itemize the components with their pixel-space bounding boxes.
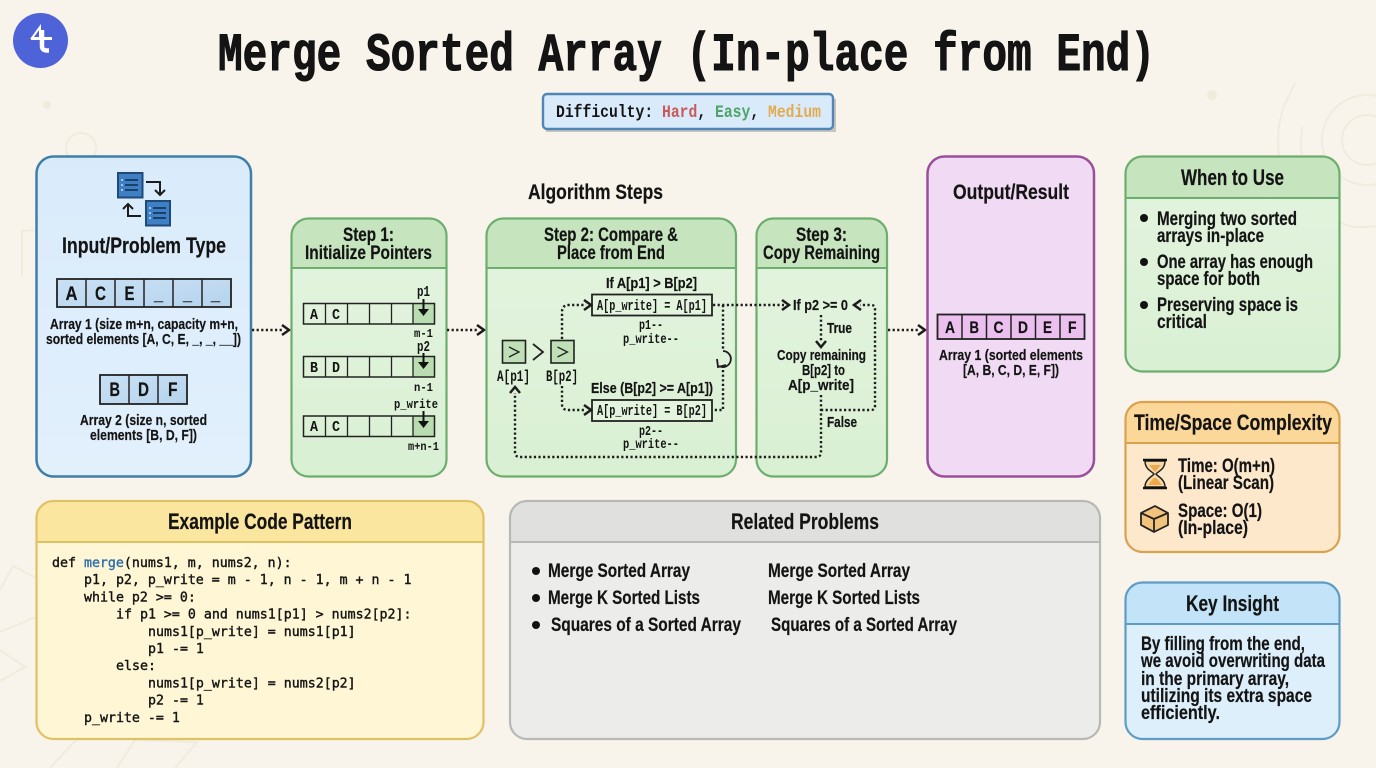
- result array: F: [1068, 318, 1076, 337]
- array row p_write: m+n-1: [408, 440, 439, 454]
- false label: False: [827, 414, 857, 431]
- code block: p1, p2, p_write = m - 1, n - 1, m + n - 1: [84, 573, 411, 588]
- comparison boxes: [497, 340, 578, 386]
- array 2 caption: [80, 412, 207, 444]
- step 3 heading: [763, 225, 880, 264]
- step 3 heading: Copy Remaining: [763, 243, 880, 264]
- else branch: [591, 380, 713, 453]
- result array: E: [1043, 318, 1052, 337]
- array row p1: p1: [417, 285, 430, 301]
- panel: output/result: [928, 156, 1094, 476]
- bullet list: Merging two sorted: [1157, 209, 1297, 230]
- step 2 heading: [544, 225, 678, 264]
- array row p2: n-1: [414, 381, 433, 395]
- array 1: [57, 279, 231, 307]
- array 1 caption: sorted elements [A, C, E, _, _, __]): [46, 331, 241, 348]
- logo: [13, 13, 68, 68]
- code block: p2 -= 1: [148, 694, 204, 709]
- array 1: C: [95, 284, 106, 305]
- difficulty badge: Difficulty: Hard, Easy, Medium: [556, 103, 821, 123]
- bullet list: One array has enough: [1157, 252, 1313, 273]
- time text: [1178, 456, 1275, 494]
- arrow: input to step 1: [252, 325, 289, 335]
- array 2: F: [168, 380, 178, 401]
- heading: Input/Problem Type: [62, 233, 226, 258]
- array 1: E: [124, 284, 134, 305]
- code block: nums1[p_write] = nums2[p2]: [148, 676, 356, 691]
- array 1: _: [210, 284, 220, 305]
- array row p1: C: [332, 308, 340, 324]
- result array: A: [945, 318, 955, 337]
- related list: Merge Sorted Array: [768, 561, 910, 582]
- code block: def merge(nums1, m, nums2, n):: [52, 556, 292, 571]
- code block: if p1 >= 0 and nums1[p1] > nums2[p2]:: [116, 608, 412, 623]
- code heading: Example Code Pattern: [168, 509, 352, 534]
- array 2 caption: elements [B, D, F]): [90, 427, 197, 444]
- condition: If p2 >= 0: [793, 297, 848, 314]
- array row p2: p2: [417, 340, 430, 356]
- key insight text: in the primary array,: [1141, 669, 1289, 690]
- else branch: Else (B[p2] >= A[p1]): [591, 380, 713, 397]
- array 1: _: [153, 284, 163, 305]
- code block: p1 -= 1: [148, 642, 204, 657]
- comparison boxes: B[p2]: [546, 368, 578, 386]
- result array: C: [994, 318, 1004, 337]
- code block: else:: [116, 659, 156, 674]
- if branch: A[p_write] = A[p1]: [597, 299, 707, 315]
- array 2 caption: Array 2 (size n, sorted: [80, 412, 207, 429]
- array 2: D: [138, 380, 149, 401]
- key insight text: efficiently.: [1141, 703, 1220, 724]
- difficulty badge: [543, 94, 836, 132]
- true label: True: [827, 320, 852, 337]
- related list: Squares of a Sorted Array: [551, 615, 741, 636]
- panel: input/problem type: [36, 156, 251, 476]
- code block: [52, 556, 412, 726]
- panel: example code pattern: [36, 501, 484, 739]
- flow arrows across steps 2 and 3: [510, 300, 875, 457]
- bullet list: arrays in-place: [1157, 226, 1264, 247]
- copy remaining text: [777, 347, 866, 394]
- related list: [532, 561, 957, 636]
- if branch: p_write--: [623, 333, 679, 348]
- array row p2: B: [310, 361, 318, 377]
- array 1 caption: [46, 316, 241, 348]
- copy remaining text: A[p_write]: [788, 377, 854, 394]
- array 2: [100, 375, 187, 404]
- arrow: step 1 to step 2: [447, 325, 484, 335]
- if branch: [592, 275, 712, 348]
- key insight text: utilizing its extra space: [1141, 686, 1312, 707]
- result caption: Array 1 (sorted elements: [939, 347, 1083, 364]
- related list: Squares of a Sorted Array: [771, 615, 957, 636]
- array row p_write: p_write: [394, 397, 438, 412]
- bullet list: critical: [1157, 312, 1207, 333]
- panel: when to use: [1126, 156, 1340, 372]
- key insight text: [1140, 634, 1325, 724]
- icon: box: [1141, 506, 1168, 532]
- result array: B: [970, 318, 979, 337]
- space text: [1178, 501, 1262, 539]
- comparison boxes: A[p1]: [497, 368, 530, 386]
- array row p1: [304, 285, 434, 341]
- panel: step 1: [292, 218, 446, 476]
- bullet list: space for both: [1157, 269, 1260, 290]
- array row p2: [304, 340, 434, 395]
- panel: time/space complexity: [1126, 402, 1340, 552]
- output heading: Output/Result: [953, 180, 1069, 204]
- step 1 heading: Initialize Pointers: [305, 243, 432, 264]
- array row p_write: [304, 397, 439, 454]
- code block: while p2 >= 0:: [84, 590, 196, 605]
- array row p1: A: [310, 308, 318, 324]
- step 2 heading: Step 2: Compare &: [544, 225, 678, 246]
- result caption: [A, B, C, D, E, F]): [963, 362, 1059, 379]
- bullet list: [1140, 209, 1313, 333]
- else branch: p2--: [639, 425, 663, 440]
- related heading: Related Problems: [731, 509, 879, 534]
- key insight text: we avoid overwriting data: [1140, 651, 1325, 672]
- step 3 heading: Step 3:: [796, 225, 847, 246]
- result caption: [939, 347, 1083, 379]
- panel: related problems: [510, 501, 1100, 739]
- key insight text: By filling from the end,: [1141, 634, 1305, 655]
- flow arrows inside step 2: [562, 300, 731, 415]
- array row p_write: C: [332, 420, 340, 436]
- array row p_write: A: [310, 420, 318, 436]
- when to use heading: When to Use: [1181, 165, 1284, 190]
- key insight heading: Key Insight: [1186, 591, 1280, 616]
- panel: step 2: [486, 218, 736, 476]
- icon: two lists swapping: [118, 173, 170, 226]
- result array: D: [1018, 318, 1028, 337]
- time text: (Linear Scan): [1178, 473, 1274, 494]
- code block: p_write -= 1: [84, 711, 180, 726]
- icon: hourglass: [1143, 460, 1167, 488]
- if branch: If A[p1] > B[p2]: [606, 275, 697, 292]
- copy remaining text: B[p2] to: [802, 362, 845, 379]
- panel: key insight: [1126, 582, 1340, 739]
- bullet list: Preserving space is: [1157, 295, 1298, 316]
- related list: Merge Sorted Array: [548, 561, 690, 582]
- arrow: step 3 to output: [888, 325, 925, 335]
- space text: Space: O(1): [1178, 501, 1262, 522]
- else branch: A[p_write] = B[p2]: [597, 404, 707, 420]
- if branch: p1--: [639, 319, 663, 334]
- panel: step 3: [756, 218, 887, 476]
- result array: [938, 314, 1084, 339]
- array 1 caption: Array 1 (size m+n, capacity m+n,: [50, 316, 238, 333]
- related list: Merge K Sorted Lists: [768, 588, 920, 609]
- copy remaining text: Copy remaining: [777, 347, 866, 364]
- time text: Time: O(m+n): [1178, 456, 1275, 477]
- array row p2: D: [332, 361, 340, 377]
- code block: nums1[p_write] = nums1[p1]: [148, 625, 356, 640]
- step 2 heading: Place from End: [557, 243, 665, 264]
- array 1: A: [66, 284, 78, 305]
- related list: Merge K Sorted Lists: [548, 588, 700, 609]
- array 1: _: [182, 284, 192, 305]
- complexity heading: Time/Space Complexity: [1134, 410, 1333, 435]
- step 1 heading: [305, 225, 432, 264]
- else branch: p_write--: [623, 438, 679, 453]
- step 1 heading: Step 1:: [343, 225, 394, 246]
- array row p1: m-1: [414, 327, 433, 341]
- space text: (In-place): [1178, 518, 1248, 539]
- heading: algorithm steps: Algorithm Steps: [528, 180, 663, 204]
- array 2: B: [110, 380, 120, 401]
